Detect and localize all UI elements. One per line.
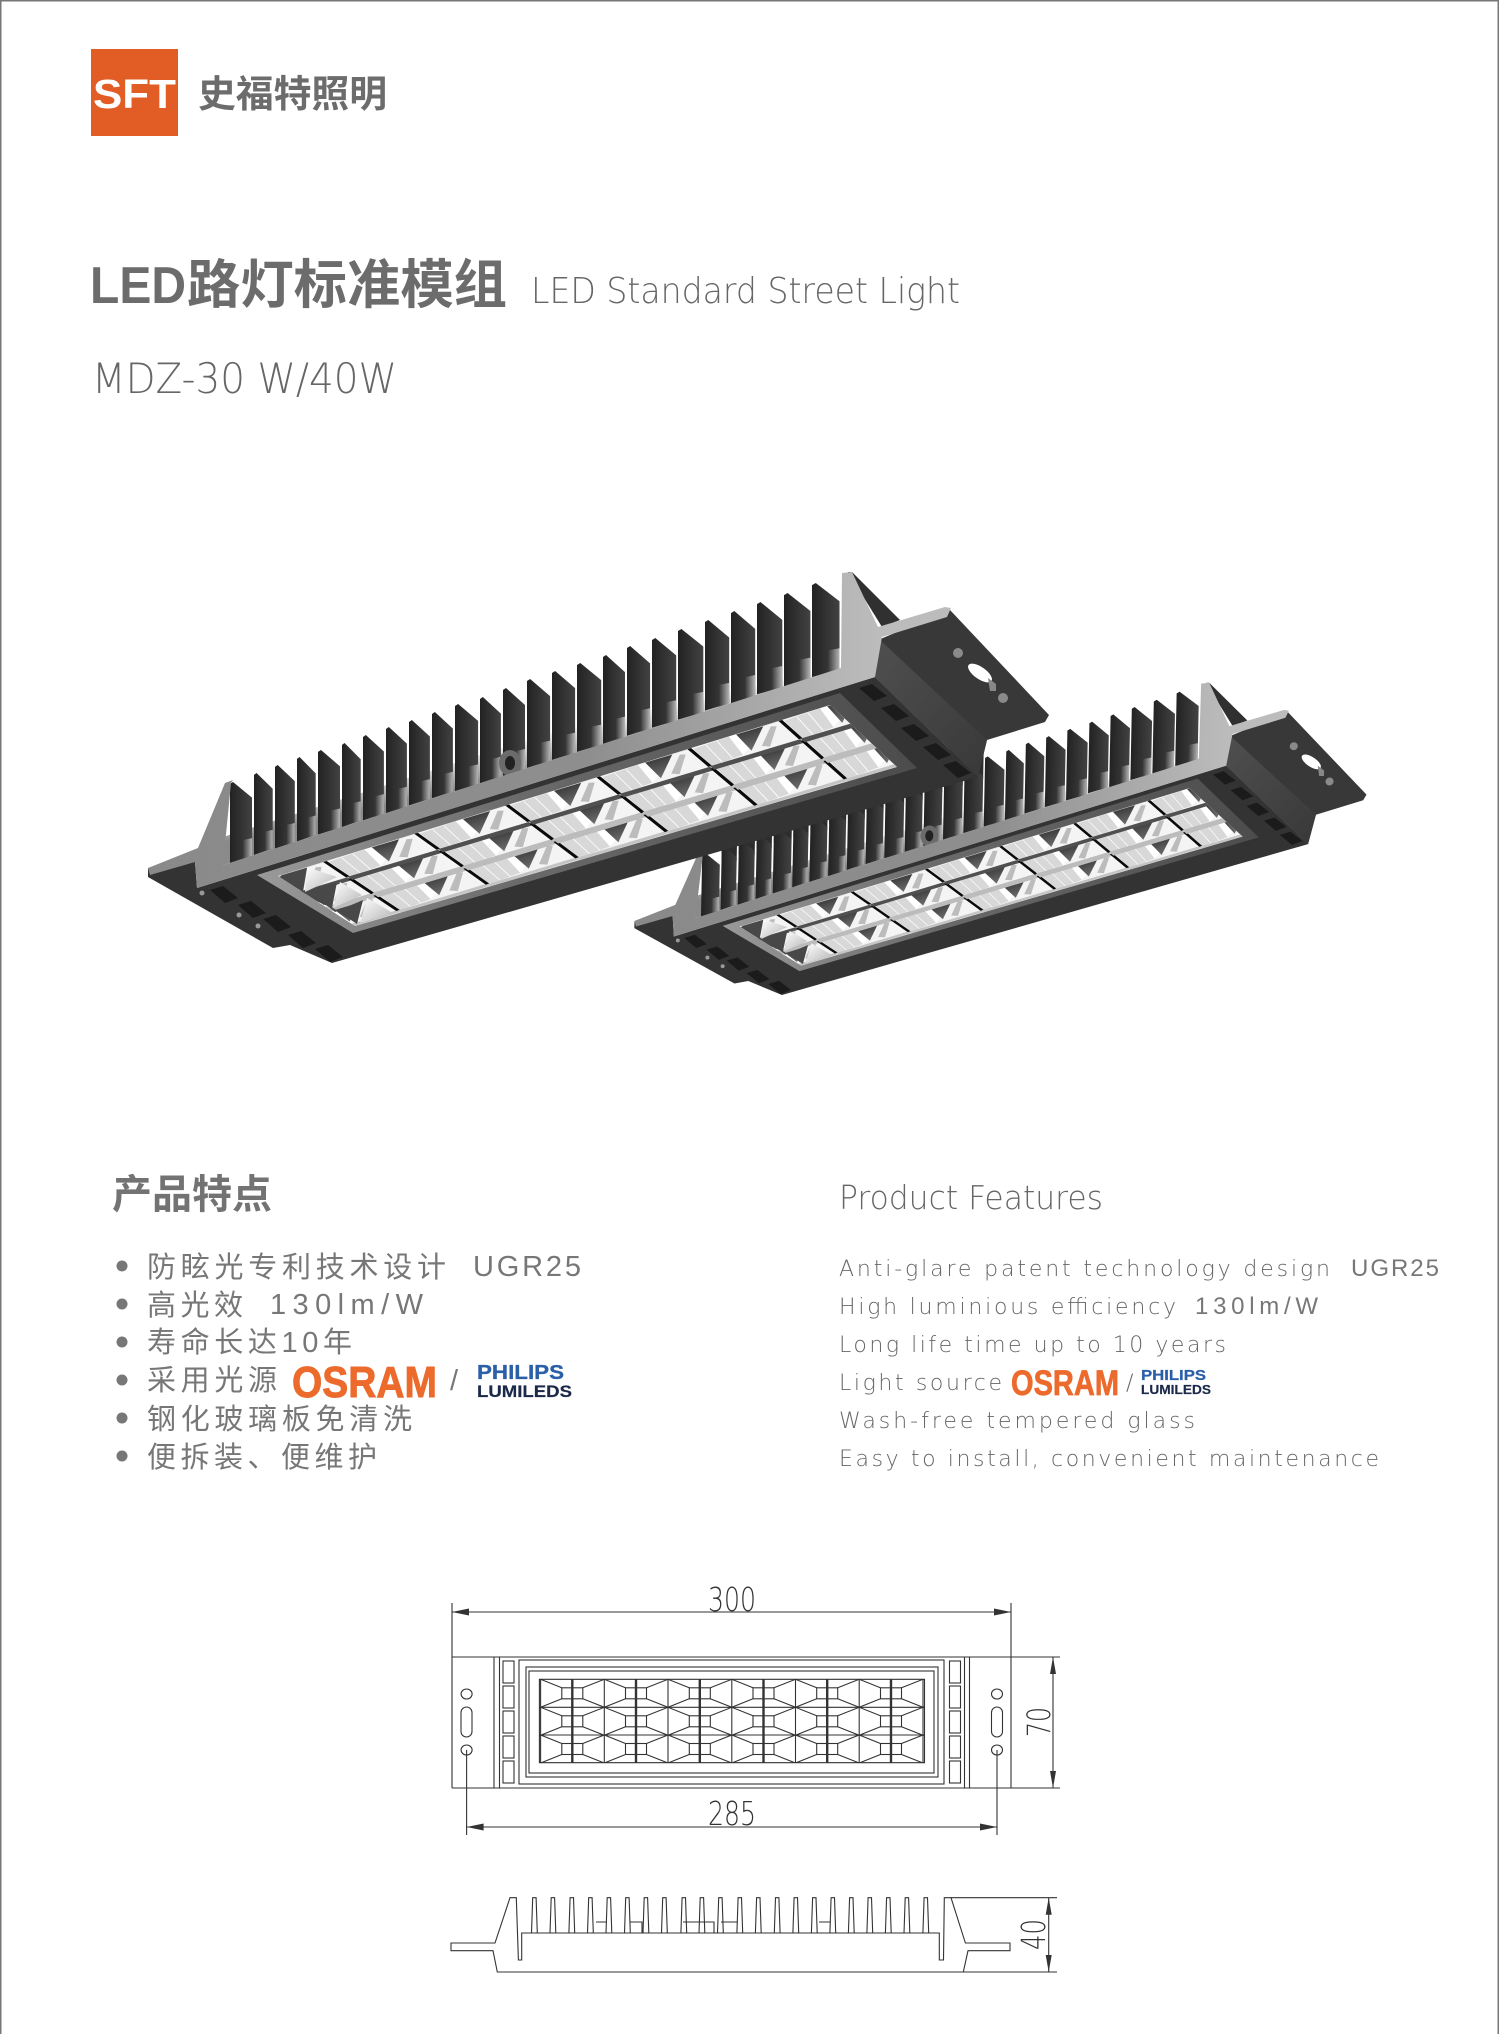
technical drawing: top view <box>452 1580 1060 1835</box>
features heading: Chinese: 产品特点 <box>112 1173 272 1217</box>
dimension: 70: 70 <box>1020 1707 1058 1737</box>
end slots <box>503 1661 960 1783</box>
feature: tempered glass: 钢化玻璃板免清洗 <box>147 1403 412 1436</box>
model number: MDZ-30 W/40W <box>92 354 397 403</box>
feature: anti-glare: 防眩光专利技术设计 <box>147 1251 446 1284</box>
feature: efficiency: 130lm/W <box>270 1289 424 1321</box>
feature: lifetime: Long life time up to 10 years <box>839 1333 1226 1358</box>
logo mark: SFT: SFT <box>93 71 176 117</box>
housing outline <box>452 1603 1060 1788</box>
dimension: 40: 40 <box>1014 1919 1053 1950</box>
logo: Philips Lumileds <box>1141 1367 1211 1397</box>
logo <box>91 49 387 136</box>
technical drawing: side view <box>451 1898 1057 1972</box>
feature: anti-glare <box>147 1251 581 1284</box>
logo: Philips Lumileds: LUMILEDS <box>1141 1382 1211 1397</box>
logo: OSRAM: OSRAM <box>1011 1364 1119 1403</box>
features list: English <box>839 1255 1439 1472</box>
dimension: 285: 285 <box>708 1794 756 1833</box>
feature: tempered glass: Wash-free tempered glass <box>839 1409 1195 1434</box>
features heading: English: Product Features <box>839 1178 1103 1217</box>
feature: light source <box>839 1364 1211 1403</box>
bullets <box>116 1260 128 1462</box>
feature: light source: 采用光源 <box>147 1364 277 1397</box>
logo: Philips Lumileds: LUMILEDS <box>477 1382 572 1401</box>
slash: / <box>1126 1371 1134 1396</box>
logo mark: SFT <box>91 49 178 136</box>
product photo: street light module, front unit <box>148 572 1049 963</box>
feature: maintenance: Easy to install, convenient maintenance <box>839 1447 1379 1472</box>
dimension: 300 <box>452 1580 1011 1657</box>
logo: Philips Lumileds <box>477 1362 572 1401</box>
title: Chinese: 路灯标准模组 <box>187 256 507 315</box>
dimension: 40 <box>951 1898 1057 1972</box>
heat-sink fins <box>532 1898 929 1933</box>
feature: light source: Light source <box>839 1371 1002 1396</box>
feature: light source <box>147 1358 572 1407</box>
housing profile <box>451 1898 1010 1972</box>
rear fins running up behind the front unit <box>722 743 984 861</box>
feature: anti-glare: UGR25 <box>473 1251 581 1283</box>
logo: Philips Lumileds: PHILIPS <box>1141 1367 1206 1384</box>
feature: lifetime: 寿命长达10年 <box>147 1326 352 1359</box>
features list: Chinese <box>116 1251 581 1474</box>
feature: maintenance: 便拆装、便维护 <box>147 1441 377 1474</box>
feature: efficiency: 130lm/W <box>1195 1293 1318 1320</box>
title: Chinese: LED <box>90 257 186 315</box>
company name: 史福特照明 <box>198 73 387 115</box>
logo: Philips Lumileds: PHILIPS <box>477 1362 564 1384</box>
mounting holes <box>461 1689 1002 1755</box>
feature: efficiency <box>147 1289 424 1322</box>
reflector grid <box>538 1678 926 1764</box>
feature: efficiency: High luminious efficiency <box>839 1295 1176 1320</box>
slash: / <box>450 1365 459 1397</box>
dimension: 300: 300 <box>708 1580 756 1619</box>
dimension: 285 <box>467 1750 997 1835</box>
title: English: LED Standard Street Light <box>531 271 960 312</box>
feature: anti-glare: Anti-glare patent technology design <box>839 1257 1330 1282</box>
feature: efficiency <box>839 1293 1318 1320</box>
product photo: street light module, rear unit <box>633 682 1369 996</box>
feature: efficiency: 高光效 <box>147 1289 243 1322</box>
dimension: 70 <box>1020 1657 1058 1788</box>
feature: anti-glare: UGR25 <box>1351 1255 1439 1282</box>
logo: OSRAM: OSRAM <box>292 1358 437 1407</box>
